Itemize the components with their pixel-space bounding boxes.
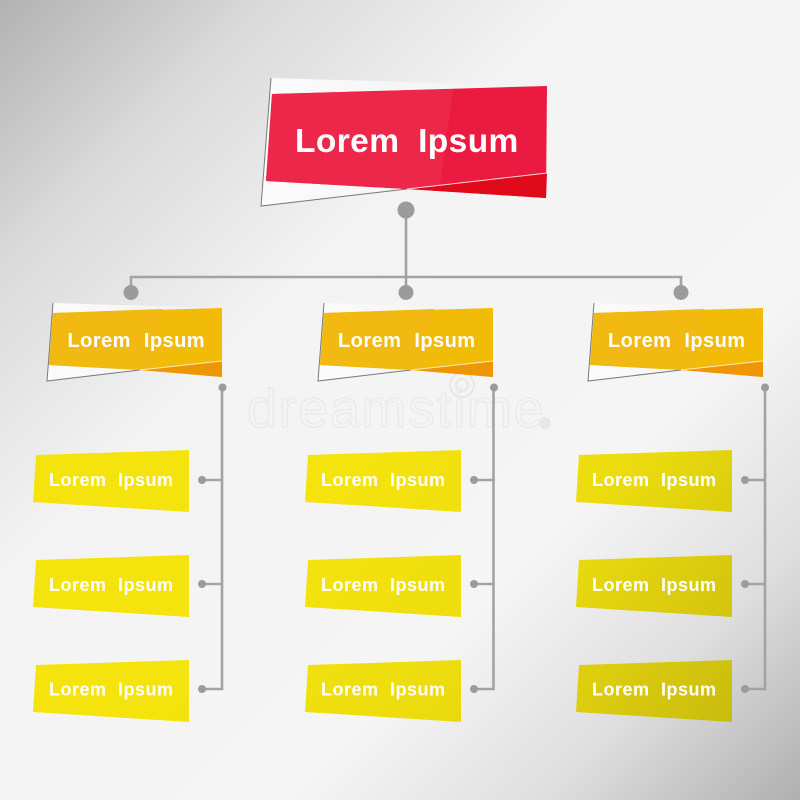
leaf box: left 1: Lorem Ipsum	[49, 470, 174, 490]
top box: red	[261, 78, 547, 206]
mid box: right orange: Lorem Ipsum	[608, 330, 746, 352]
leaf box: right 1	[576, 450, 732, 512]
mid box: right orange	[588, 303, 763, 381]
mid box: left orange: Lorem Ipsum	[68, 330, 205, 352]
left branch dot	[124, 285, 138, 300]
leaf box: right 1: Lorem Ipsum	[592, 470, 717, 490]
leaf box: centre 2: Lorem Ipsum	[321, 575, 446, 595]
leaf box: centre 2	[305, 555, 461, 617]
middle branch dot	[398, 285, 414, 300]
top node dot	[398, 202, 414, 218]
connector: left column	[198, 384, 226, 693]
connector: right column	[741, 384, 769, 693]
top box: red: Lorem Ipsum	[295, 123, 519, 160]
leaf box: left 3	[33, 660, 189, 722]
leaf box: right 3: Lorem Ipsum	[592, 680, 717, 700]
leaf box: right 2	[576, 555, 732, 617]
right branch dot	[674, 285, 688, 300]
top connector lines	[131, 210, 681, 292]
leaf box: left 3: Lorem Ipsum	[49, 680, 174, 700]
leaf box: centre 1	[305, 450, 461, 512]
leaf box: left 2: Lorem Ipsum	[49, 575, 174, 595]
leaf box: left 2	[33, 555, 189, 617]
leaf box: right 2: Lorem Ipsum	[592, 575, 717, 595]
leaf box: right 3	[576, 660, 732, 722]
mid box: left orange	[47, 303, 222, 381]
leaf box: centre 3	[305, 660, 461, 722]
watermark: dreamstime	[247, 379, 545, 439]
mid box: centre orange	[318, 303, 493, 381]
connector: centre column	[470, 384, 498, 693]
leaf box: left 1	[33, 450, 189, 512]
leaf box: centre 1: Lorem Ipsum	[321, 470, 446, 490]
leaf box: centre 3: Lorem Ipsum	[321, 680, 446, 700]
mid box: centre orange: Lorem Ipsum	[338, 330, 476, 352]
